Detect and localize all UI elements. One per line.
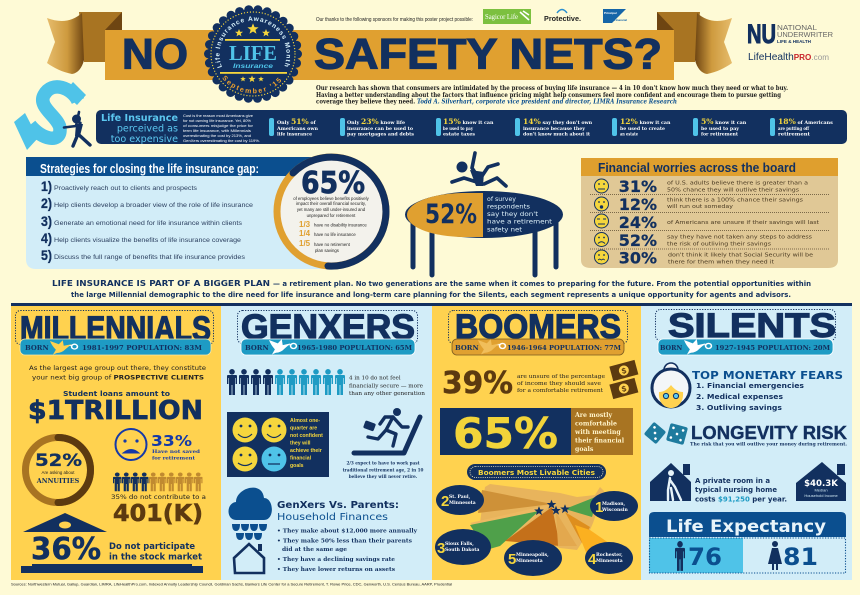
text: cost explanation: Cost is the reason most Americans give: [183, 114, 253, 118]
male 76: [675, 541, 722, 571]
right ribbon fold: [657, 12, 732, 74]
stat: 23%: [340, 117, 414, 138]
city 3: Sioux Falls: 3: [437, 540, 445, 557]
stat house: median household income: Household Income: [804, 493, 838, 498]
panel: silents: [641, 306, 852, 580]
text: top monetary fears: TOP MONETARY FEARS: [692, 369, 843, 382]
stat: 14%: insurance because they: [523, 126, 585, 132]
city 2: St. Paul: 2: [441, 493, 449, 510]
stat: 15%: estate taxes: [443, 132, 475, 138]
worry 52%: say they have not taken any steps to address: [667, 234, 812, 240]
left ribbon fold: [47, 12, 122, 74]
stat: 39% unsure: are unsure of the percentage: [517, 374, 605, 380]
strategy 3: 3): [41, 213, 52, 229]
circle stat: 65% of employees: [276, 156, 386, 266]
text: cost explanation: for not owning life insurance. Yet, 80%: [183, 119, 252, 123]
logo: Principal: Financial: [614, 18, 627, 22]
intro paragraph: coverage they believe they need. Todd A. Silverhart, corporate vice president and director, LIMRA Insurance Research: [316, 98, 677, 106]
title banner: [47, 12, 732, 80]
text: prospective clients: [29, 365, 206, 382]
strategy 5: Discuss the full range of benefits that life insurance provides: [54, 254, 245, 261]
people chart: 4 in 10: [227, 369, 345, 395]
text: nursing home cost: costs $91,250 per year.: [695, 496, 787, 504]
stat: 18%: 18% of Americans: [778, 117, 833, 126]
stat: 12%: 12% know it can: [620, 117, 671, 126]
text: life insurance is part of a bigger plan: LIFE INSURANCE IS PART OF A BIGGER PLAN: [52, 279, 270, 288]
worry 52%: [594, 231, 812, 250]
panel: strategies for closing the gap: [26, 157, 320, 269]
heading: perceived as too expensive: too expensive: [111, 134, 178, 145]
stat: 51%: [269, 117, 319, 138]
strategy 2: 2): [41, 195, 52, 211]
stat: 33% not saved: 33%: [151, 432, 192, 450]
heading: perceived as too expensive: perceived as: [117, 124, 178, 134]
logo: Sagicor Life: [483, 9, 531, 24]
city 5: Minneapolis: Minnesota: [516, 558, 543, 564]
city 1: Madison: 1: [595, 499, 603, 516]
heading: boomers: BOOMERS: [455, 308, 621, 346]
logo: National Underwriter: [747, 19, 833, 49]
born pill: BORN: [25, 344, 49, 352]
text: top monetary fears: [692, 369, 843, 412]
trampoline: 52% no safety net: respondents: [487, 202, 531, 210]
born pill: BORN: [245, 344, 269, 352]
logo: National Underwriter: LIFE & HEALTH: [777, 39, 812, 44]
city 2: St. Paul: Minnesota: [449, 500, 476, 506]
city 4: Rochester: 4: [588, 551, 597, 568]
list: household finance bullets: did at the same age: [282, 547, 347, 553]
heading: silents: SILENTS: [668, 307, 836, 345]
worry 31%: 50% chance they will outlive their savings: [667, 188, 799, 194]
male 76: 76: [688, 543, 722, 571]
headline NO: NO: [122, 30, 188, 78]
stat: student loans $1 trillion: Student loans amount to: [63, 389, 170, 398]
text: 2/3 expect to work past retirement: believe they will never retire.: [349, 474, 418, 479]
box: confidence faces: not confident: [290, 433, 323, 439]
stat box: 65% comfortable: Are mostly: [574, 412, 613, 419]
box: confidence faces: they will: [290, 440, 311, 446]
panel: life expectancy: Life Expectancy: [666, 517, 826, 536]
stat: 39% unsure: of income they should save: [517, 381, 601, 387]
stat box: 65% comfortable: with meeting: [574, 429, 621, 436]
stat: 39% unsure: for a comfortable retirement: [517, 388, 603, 394]
stat box: 65% comfortable: [440, 408, 633, 458]
trampoline: 52% no safety net: 52%: [425, 199, 477, 230]
text: nursing home cost: [695, 477, 787, 504]
stat: 15%: [436, 117, 494, 138]
born pill: [452, 339, 624, 355]
text: cost explanation: term life insurance, with Millennials: [183, 129, 251, 133]
stat: 15%: be used to pay: [443, 126, 473, 132]
box: confidence faces: quarter are: [290, 426, 317, 432]
sponsors row: [316, 9, 627, 24]
stat: 23%: pay mortgages and debts: [347, 132, 414, 138]
list: household finance bullets: • They have a declining savings rate: [277, 557, 395, 563]
fraction: 1/5: 1/5: [299, 239, 311, 248]
stat: 39% unsure: 39%: [442, 366, 513, 401]
city 1: Madison: Wisconsin: [601, 507, 628, 513]
worry 12%: think there is a 100% chance their savings: [667, 198, 803, 204]
trampoline: 52% no safety net: [405, 191, 563, 275]
stat: 15%: 15% know it can: [443, 117, 494, 126]
bank icon: 36% stock market: in the stock market: [109, 552, 202, 562]
heading: genxers vs parents: [277, 500, 399, 523]
icon: grandmother: [652, 363, 690, 408]
strategy 5: [41, 247, 245, 263]
text: longevity risk: LONGEVITY RISK: [691, 422, 848, 443]
circle stat: 65% of employees: yet many are still under-insured and: [297, 207, 366, 212]
list: household finance bullets: • They make 50% less than their parents: [277, 538, 413, 544]
sources: Sources: Northwestern Mutual, Gallup, Guardian, LIMRA, LifeHealthPro.com, Indexed Annuity Leadership Council, Goldman Sachs, Bankers Life Center for a Secure Retirement, T. Rowe Price, CDC, Genworth, U.S. Census Bureau, AARP, Prudential: [11, 582, 452, 586]
stat: 39% unsure: [442, 366, 605, 401]
strategy 1: 1): [41, 178, 52, 194]
stat: 51%: Americans own: [276, 126, 319, 132]
logo: National Underwriter: UNDERWRITER: [777, 32, 833, 39]
fraction: 1/4: have no life insurance: [314, 232, 356, 237]
stat box: 65% comfortable: goals: [575, 446, 594, 453]
born pill: [658, 339, 833, 355]
stat: 14%: [515, 117, 593, 138]
fraction: 1/3: 1/3: [299, 220, 311, 229]
city 4: Rochester: Minnesota: [596, 558, 623, 564]
stat: 401(k): 35% do not contribute to a: [111, 494, 206, 501]
worry 24%: of Americans are unsure if their savings will last: [667, 220, 819, 226]
heading: strategies: Strategies for closing the life insurance gap:: [40, 161, 259, 176]
fraction: 1/3: have no disability insurance: [314, 222, 367, 228]
stat box: 65% comfortable: 65%: [453, 409, 558, 458]
logo: LifeHealthPRO.com: LifeHealthPRO.com: [748, 52, 829, 63]
box: confidence faces: achieve their: [290, 448, 322, 454]
born pill: 1946-1964 POPULATION: 77M: [507, 344, 621, 352]
trampoline: 52% no safety net: of survey: [487, 195, 516, 203]
city 5: Minneapolis: 5: [508, 551, 516, 568]
seal: Life Insurance Awareness Month: September '15: [222, 76, 281, 94]
strategy 3: [41, 213, 242, 229]
stat: student loans $1 trillion: $1TRILLION: [28, 396, 203, 426]
born pill: BORN: [455, 344, 479, 352]
trampoline: 52% no safety net: have a retirement: [487, 218, 553, 226]
stat: 18%: retirement: [778, 132, 811, 138]
city 2: St. Paul: St. Paul,: [449, 494, 471, 500]
fraction: 1/5: [299, 239, 351, 253]
panel: genxers: [221, 306, 432, 580]
circle stat: 65% of employees: impact their overall financial security,: [296, 201, 366, 206]
text: life insurance is part of a bigger plan: [52, 279, 811, 299]
text: nursing home cost: typical nursing home: [695, 486, 777, 494]
worry 24%: 24%: [619, 213, 657, 232]
map: cities: [470, 484, 616, 562]
worry 24%: [594, 213, 819, 232]
text: 4 in 10: financially secure — more: [349, 384, 424, 390]
ring: 52% asking about annuities: Are asking about: [42, 470, 75, 475]
text: 2/3 expect to work past retirement: 2/3 expect to have to work past: [346, 460, 420, 466]
born pill: [241, 339, 415, 355]
heading: genxers vs parents: Household Finances: [277, 512, 388, 523]
text: life insurance is part of a bigger plan: — a retirement plan. No two generations are the same when it comes to preparing for the future. From the potential opportunities within: [273, 280, 811, 288]
heading: genxers: GENXERS: [241, 308, 415, 347]
text: 4 in 10: [349, 376, 425, 397]
worry 31%: [594, 177, 808, 196]
seal: Life Insurance Awareness Month: LIFE: [229, 41, 277, 65]
text: life insurance is part of a bigger plan: the large Millennial demographic to the dire need for life insurance and long-term care planning for the Silents, each segment represents a unique opportunity for agents and advisors.: [71, 291, 791, 299]
text: prospective clients: your next big group of PROSPECTIVE CLIENTS: [32, 374, 204, 382]
stat: 18%: are putting off: [778, 126, 810, 132]
strategy 1: Proactively reach out to clients and prospects: [54, 185, 197, 192]
stat box: 65% comfortable: comfortable: [575, 420, 617, 428]
city 1: Madison: [590, 491, 638, 521]
circle stat: 65% of employees: of employees believe benefits positively: [293, 196, 370, 201]
stat: 18%: [770, 117, 833, 138]
bank icon: 36% stock market: Do not participate: [109, 541, 195, 551]
circle stat: 65% of employees: unprepared for retirement: [307, 213, 356, 218]
city 4: Rochester: Rochester,: [596, 552, 623, 558]
worry 12%: [594, 195, 803, 214]
worry 12%: 12%: [619, 195, 657, 214]
panel: millennials: [11, 306, 221, 580]
ring: 52% asking about annuities: 52%: [35, 451, 82, 471]
female 81: 81: [783, 543, 818, 571]
female 81: [768, 541, 818, 571]
banner band: [105, 30, 674, 80]
text: top monetary fears: 2. Medical expenses: [696, 392, 784, 401]
icon: falling person: [452, 153, 506, 186]
box: confidence faces: Almost one-: [290, 418, 320, 424]
ring: 52% asking about annuities: [26, 438, 91, 502]
heading: perceived as too expensive: [101, 113, 178, 145]
box: confidence faces: [227, 412, 329, 477]
stat house: median household income: $40.3K: [804, 479, 838, 489]
worry 31%: 31%: [619, 177, 657, 196]
heading: most livable cities: Boomers Most Livable Cities: [478, 469, 595, 477]
text: top monetary fears: 1. Financial emergencies: [696, 381, 805, 390]
text: cost explanation: [183, 114, 260, 143]
icon: dollar sign pushed by person: [14, 82, 90, 150]
list: household finance bullets: • They have lower returns on assets: [277, 567, 396, 573]
text: nursing home cost: A private room in a: [695, 477, 770, 485]
stat: 33% not saved: [116, 429, 201, 462]
fraction: 1/5: plan savings: [315, 248, 339, 253]
icon: running on treadmill: [354, 408, 420, 453]
logo: National Underwriter: NU: [747, 19, 776, 49]
logo: Principal: [603, 9, 627, 23]
strategy 5: 5): [41, 247, 52, 263]
stat: 14%: don't know much about it: [523, 132, 591, 138]
worry 30%: there for them when they need it: [668, 260, 774, 266]
born pill: BORN: [660, 344, 682, 352]
stat house: median household income: Median: [814, 488, 828, 492]
born pill: 1981-1997 POPULATION: 83M: [82, 344, 202, 352]
born pill: [20, 339, 211, 355]
stat: 5%: be used to pay: [701, 126, 739, 132]
strategy 2: [41, 195, 254, 211]
icon: money: $: [621, 366, 628, 376]
city 5: Minneapolis: Minneapolis,: [516, 552, 549, 558]
stat: 14%: 14% say they don't own: [523, 117, 593, 126]
icon: nursing home: [650, 463, 691, 501]
strategy 3: Generate an emotional need for life insurance within clients: [54, 220, 242, 227]
text: cost explanation: of consumers misjudge the price for: [183, 124, 254, 128]
strategy 4: 4): [41, 230, 52, 246]
city 5: Minneapolis: [504, 540, 562, 576]
fraction: 1/4: [299, 229, 356, 238]
stat: 5%: for retirement: [701, 132, 739, 138]
fraction: 1/3: [299, 220, 367, 229]
box: confidence faces: financial: [290, 456, 312, 462]
fraction: 1/4: 1/4: [299, 229, 311, 238]
worry 52%: the risk of outliving their savings: [667, 242, 771, 248]
divider bar: [11, 303, 852, 306]
stat: 5%: [693, 117, 747, 138]
logo: Protective: Protective.: [544, 14, 581, 23]
panel: life expectancy: [649, 512, 846, 573]
icon: dice: [644, 422, 688, 445]
stat: 401(k): 401(K): [113, 501, 203, 527]
text: cost explanation: overestimating the cost by 213%, and: [183, 134, 251, 138]
icon: money: $: [621, 384, 628, 394]
text: prospective clients: As the largest age group out there, they constitute: [29, 365, 206, 372]
panel: too expensive stats bar: [96, 110, 847, 145]
stat: 12%: be used to create: [620, 126, 665, 132]
logo: Sagicor Life: Sagicor Life: [485, 13, 518, 21]
heading: financial worries: Financial worries across the board: [598, 160, 796, 175]
text: cost explanation: GenXers overestimating the cost by 119%.: [183, 139, 260, 143]
heading: most livable cities: [467, 464, 606, 480]
panel: financial worries across the board: [581, 158, 838, 268]
stat: 33% not saved: Have not saved: [152, 449, 201, 455]
city 1: Madison: Madison,: [602, 501, 626, 507]
text: 4 in 10: 4 in 10 do not feel: [349, 376, 401, 382]
stat box: 65% comfortable: their financial: [575, 438, 625, 444]
box: confidence faces: goals: [290, 463, 304, 469]
strategy 4: Help clients visualize the benefits of life insurance coverage: [54, 237, 242, 244]
worry 31%: of U.S. adults believe there is greater than a: [667, 180, 808, 186]
stat house: median household income: [796, 462, 846, 501]
circle stat: 65% of employees: 65%: [301, 166, 365, 201]
worry 12%: will run out someday: [667, 204, 734, 210]
stat: 51%: Only 51% of: [277, 117, 317, 126]
heading: millennials: MILLENNIALS: [20, 310, 211, 348]
text: 2/3 expect to work past retirement: traditional retirement age, 2 in 10: [343, 468, 423, 472]
stat: 23%: insurance can be used to: [347, 126, 413, 132]
city 2: St. Paul: [436, 485, 484, 515]
icon: money: [609, 360, 638, 399]
stat: 5%: 5% know it can: [701, 117, 747, 126]
worry 30%: don't think it likely that Social Security will be: [668, 252, 814, 258]
text: longevity risk: The risk that you will outlive your money during retirement.: [690, 442, 848, 446]
bank icon: 36% stock market: [21, 513, 203, 573]
fraction: 1/5: have no retirement: [314, 242, 351, 247]
intro paragraph: [316, 84, 788, 106]
logo: National Underwriter: NATIONAL: [777, 25, 817, 32]
heading: genxers vs parents: GenXers Vs. Parents:: [277, 500, 399, 511]
seal: Life Insurance Awareness Month: Life Insurance Awareness Month: [214, 16, 290, 68]
logo: Principal: Principal: [604, 11, 617, 15]
stat: 23%: Only 23% know life: [347, 117, 405, 126]
born pill: 1927-1945 POPULATION: 20M: [715, 344, 830, 352]
worry 30%: [594, 248, 814, 268]
city 3: Sioux Falls: South Dakota: [445, 547, 479, 553]
bank icon: 36% stock market: 36%: [31, 532, 101, 567]
stat: 12%: an estate: [620, 132, 638, 138]
worry 30%: 30%: [619, 248, 657, 268]
people chart: 35%: [113, 472, 202, 491]
list: household finance bullets: [277, 528, 418, 573]
seal: Life Insurance Awareness Month: Insurance: [233, 63, 274, 70]
stat: 51%: life insurance: [277, 132, 312, 138]
strategy 1: [41, 178, 197, 194]
born pill: 1965-1980 POPULATION: 65M: [297, 344, 412, 352]
trampoline: 52% no safety net: say they don't: [487, 210, 539, 218]
panel: boomers: [432, 306, 641, 580]
icon: cloud rain house: [228, 488, 272, 573]
ring: 52% asking about annuities: ANNUITIES: [36, 477, 80, 485]
stat: 12%: [612, 117, 671, 138]
text: 4 in 10: than any other generation: [349, 391, 425, 397]
text: 2/3 expect to work past retirement: [343, 460, 423, 479]
city 4: Rochester: [585, 542, 633, 574]
sponsor thanks: Our thanks to the following sponsors for making this poster project possible:: [316, 17, 473, 23]
logo: Protective: [544, 10, 581, 23]
trampoline: 52% no safety net: safety net: [487, 226, 523, 234]
worry 52%: 52%: [619, 231, 657, 250]
city 3: Sioux Falls: Sioux Falls,: [445, 541, 474, 547]
heading: perceived as too expensive: Life Insurance: [101, 113, 178, 124]
list: household finance bullets: • They make about $12,000 more annually: [277, 528, 418, 534]
seal: Life Insurance Awareness Month: [204, 5, 302, 103]
city 3: Sioux Falls: [435, 529, 491, 565]
strategy 4: [41, 230, 242, 246]
stat: 33% not saved: for retirement: [152, 456, 196, 462]
headline SAFETY NETS?: SAFETY NETS?: [314, 30, 662, 78]
strategy 2: Help clients develop a broader view of the role of life insurance: [54, 202, 254, 209]
text: top monetary fears: 3. Outliving savings: [696, 403, 783, 412]
